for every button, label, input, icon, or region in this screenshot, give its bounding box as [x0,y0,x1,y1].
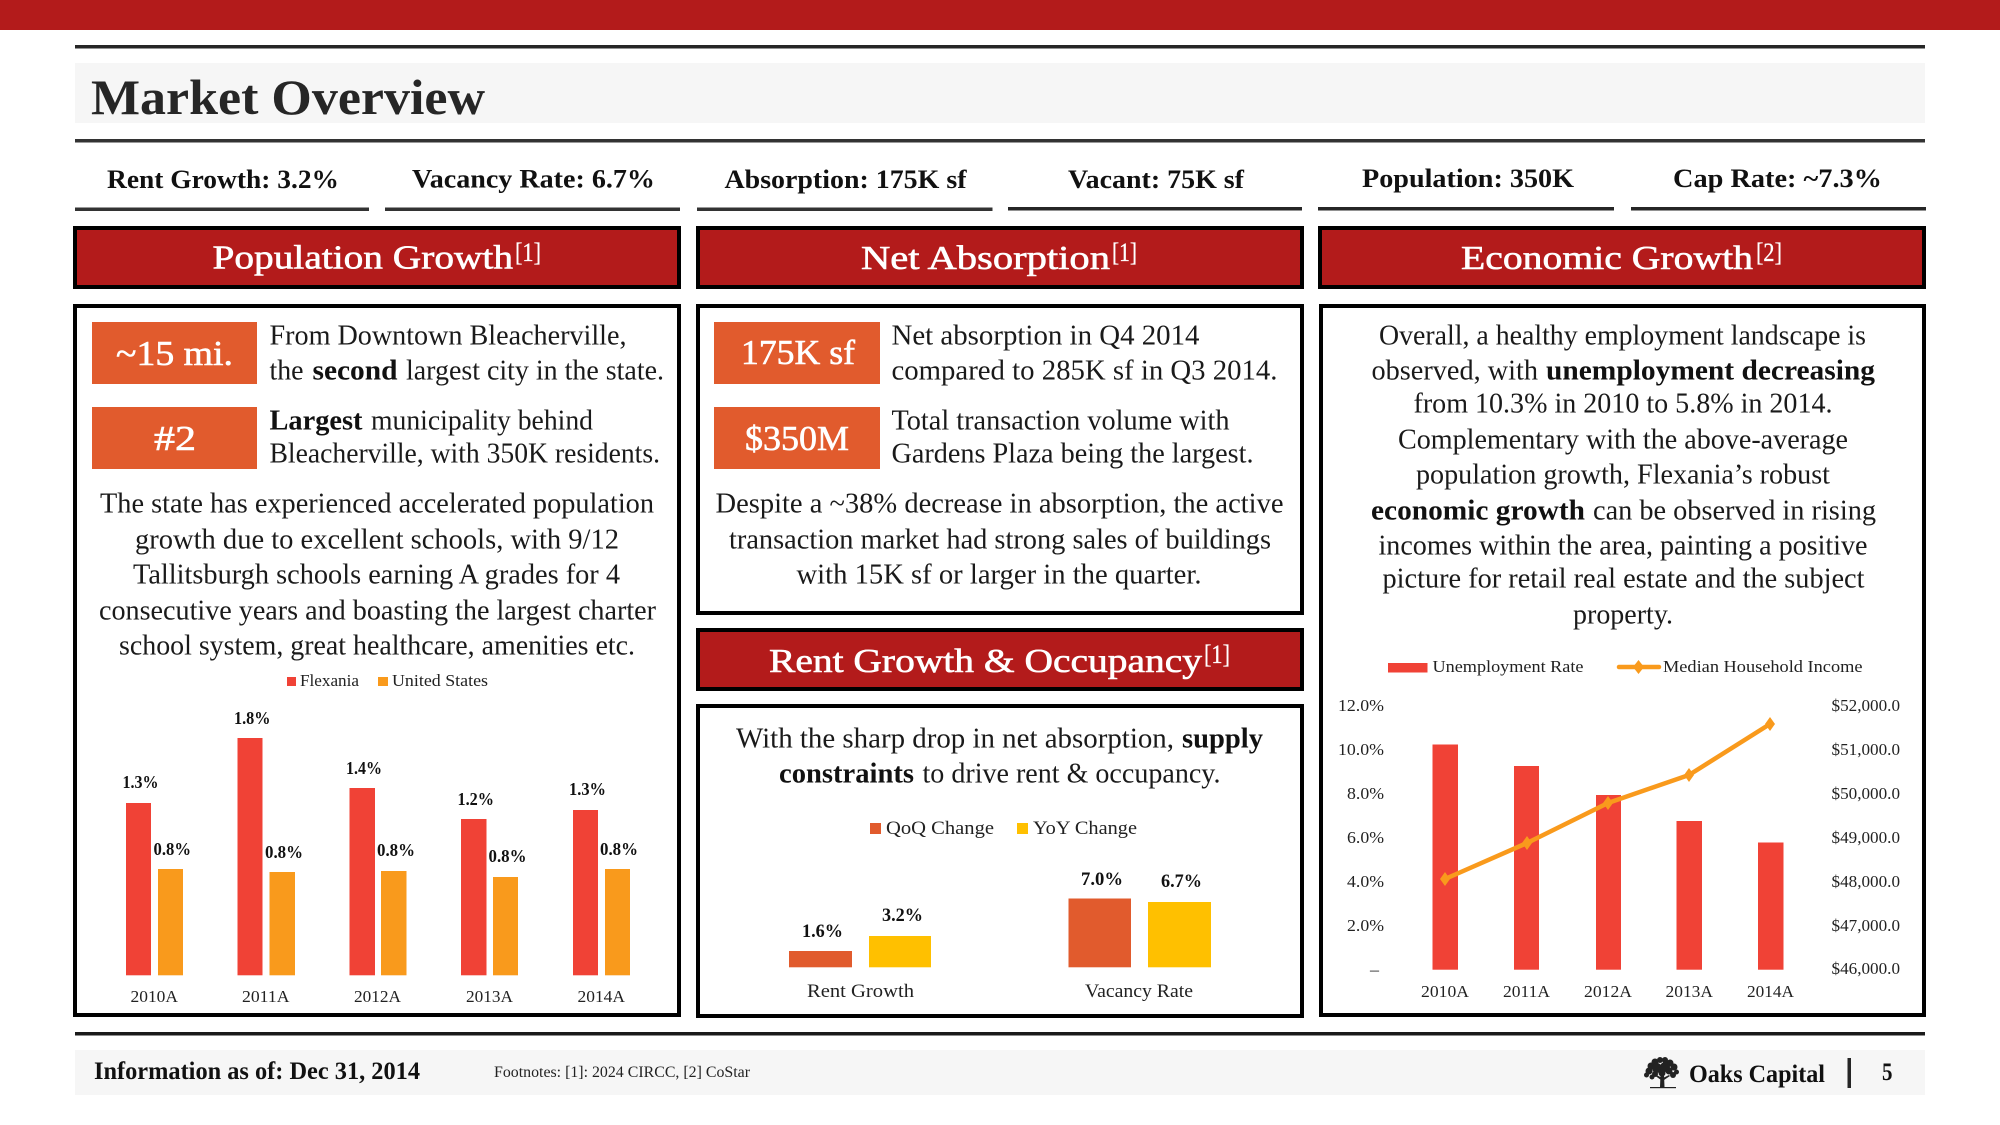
text: absorption paragraph [716,489,1284,591]
bar chart: rent and vacancy: 7.0% [1081,869,1123,890]
bar chart: population growth [122,671,638,1006]
text: population paragraph: The state has experienced accelerated population [100,489,654,520]
text: economic paragraph: population growth, Flexania’s robust [1416,460,1830,491]
heading: population growth: Population Growth [212,240,513,276]
text: rank note [270,406,660,470]
stat: transaction volume [714,407,880,469]
text: absorption paragraph: transaction market had strong sales of buildings [729,525,1271,556]
text: transaction note: Gardens Plaza being the largest. [892,439,1254,470]
text: absorption paragraph: Despite a ~38% decrease in absorption, the active [716,489,1284,520]
text: supply constraints: constraints [779,759,914,790]
text: distance note [270,321,664,387]
KPI: rent growth: Rent Growth: 3.2% [107,165,339,194]
text: economic paragraph [1371,321,1876,631]
legend: Flexania [300,671,359,690]
text: absorption note [892,321,1278,387]
icon: oak tree logo [1644,1057,1679,1088]
legend: Unemployment Rate [1432,657,1584,676]
text: economic paragraph: incomes within the area, painting a positive [1378,531,1868,562]
combo chart: unemployment and income: 2011A [1503,982,1551,1001]
KPI: vacant [1008,165,1302,210]
bar chart: rent and vacancy: 6.7% [1161,871,1202,892]
legend [870,819,1137,839]
text: supply constraints: With the sharp drop in net absorption, [736,724,1174,755]
heading: rent growth and occupancy: [1] [1204,640,1230,669]
panel: economic growth [1321,306,1924,1015]
text: economic paragraph: picture for retail real estate and the subject [1382,564,1865,595]
left axis: – [1369,960,1380,979]
footer: as-of date: Information as of: Dec 31, 2014 [94,1058,420,1085]
stat: net absorption [714,322,880,384]
right axis: $47,000.0 [1832,916,1900,935]
stat: distance: ~15 mi. [116,334,233,373]
KPI: vacancy rate: Vacancy Rate: 6.7% [412,164,655,194]
bar chart: population growth: 2010A [130,987,179,1006]
legend: YoY Change [1033,819,1137,839]
legend: United States [392,671,488,690]
text: economic paragraph: unemployment decreasing [1546,356,1875,387]
bar chart: population growth: 2014A [578,987,626,1006]
text: transaction note: Total transaction volume with [892,406,1230,437]
text: economic paragraph: economic growth [1371,496,1585,527]
bar chart: population growth: 0.8% [154,839,191,859]
KPI strip [75,164,1926,211]
heading: net absorption: Net Absorption [861,240,1110,277]
right axis: $51,000.0 [1832,740,1900,759]
bar chart: population growth: 2011A [242,987,290,1006]
left axis: 8.0% [1347,784,1384,803]
KPI: population [1318,164,1614,210]
text: population paragraph: Tallitsburgh schools earning A grades for 4 [133,560,620,591]
KPI: vacant: Vacant: 75K sf [1068,165,1244,194]
right axis: $50,000.0 [1832,784,1900,803]
text: supply constraints [736,724,1263,790]
heading: rent growth and occupancy [698,630,1302,689]
KPI: cap rate [1631,164,1926,210]
text: rank note: municipality behind [371,406,593,437]
text: distance note: largest city in the state. [406,356,664,387]
legend: Median Household Income [1663,657,1862,676]
bar chart: rent and vacancy: 1.6% [802,921,843,942]
left axis: 4.0% [1347,872,1384,891]
text: population paragraph: consecutive years and boasting the largest charter [99,596,657,627]
KPI: rent growth [75,165,369,211]
heading: rent growth and occupancy: Rent Growth & Occupancy [769,643,1202,680]
text: economic paragraph: observed, with [1372,356,1538,387]
text: population paragraph: school system, great healthcare, amenities etc. [119,631,635,662]
panel: net absorption [698,306,1302,613]
left axis: 2.0% [1347,916,1384,935]
combo chart: unemployment and income: 2013A [1666,982,1714,1001]
footer: page number: 5 [1882,1059,1892,1086]
bar chart: population growth: 0.8% [488,846,526,866]
KPI: cap rate: Cap Rate: ~7.3% [1673,164,1882,193]
stat: distance [92,322,257,384]
text: absorption note: Net absorption in Q4 2014 [892,321,1200,352]
panel: rent growth and occupancy [698,706,1302,1016]
bar chart: population growth: 0.8% [377,840,415,860]
income line [1440,717,1775,886]
legend [1388,657,1862,676]
heading: population growth [75,228,679,287]
bar chart: rent and vacancy [789,819,1211,1002]
text: distance note: From Downtown Bleacherville, [270,321,626,352]
text: absorption paragraph: with 15K sf or larger in the quarter. [796,560,1202,591]
footer: footnotes: Footnotes: [1]: 2024 CIRCC, [2] CoStar [494,1064,751,1081]
bar chart: population growth: 1.4% [346,758,382,778]
KPI: absorption [697,165,992,211]
combo chart: unemployment and income [1338,657,1900,1001]
right axis: $48,000.0 [1832,872,1900,891]
left axis [1338,696,1384,979]
heading: net absorption: [1] [1112,238,1137,267]
right axis [1832,696,1900,978]
right axis: $52,000.0 [1832,696,1900,715]
text: distance note: second [312,356,398,387]
heading: economic growth: Economic Growth [1461,240,1753,277]
right axis: $49,000.0 [1832,828,1900,847]
bar chart: population growth: 1.3% [569,779,606,799]
bar chart: population growth: 1.3% [122,772,158,792]
heading: economic growth: [2] [1756,238,1782,267]
bar chart: rent and vacancy: Rent Growth [807,982,914,1002]
combo chart: unemployment and income: 2010A [1421,982,1470,1001]
legend: QoQ Change [886,819,994,839]
text: rank note: Largest [270,406,363,437]
top red banner [0,0,2000,30]
legend [287,671,488,690]
footer band [75,1050,1925,1095]
left axis: 12.0% [1338,696,1384,715]
text: economic paragraph: Complementary with the above-average [1398,425,1848,456]
text: supply constraints: supply [1182,724,1263,755]
stat: net absorption: 175K sf [741,333,855,372]
bar chart: population growth: 0.8% [600,839,638,859]
left axis: 6.0% [1347,828,1384,847]
text: economic paragraph: can be observed in rising [1593,496,1876,527]
text: supply constraints: to drive rent & occupancy. [922,759,1220,790]
right axis: $46,000.0 [1832,959,1900,978]
KPI: absorption: Absorption: 175K sf [724,165,967,194]
heading: net absorption [698,228,1302,287]
footer: company name: Oaks Capital [1689,1061,1825,1088]
left axis: 10.0% [1338,740,1384,759]
bar chart: population growth: 1.2% [458,789,494,809]
bar chart: population growth: 1.8% [234,708,270,728]
text: transaction note [892,406,1254,470]
KPI: vacancy rate [385,164,680,211]
KPI: population: Population: 350K [1362,164,1575,193]
bar chart: population growth: 2013A [466,987,514,1006]
stat: transaction volume: $350M [745,419,849,458]
bar chart: population growth: 2012A [354,987,402,1006]
stat: rank: #2 [154,419,196,458]
text: population paragraph: growth due to excellent schools, with 9/12 [135,525,619,556]
heading: population growth: [1] [515,238,541,267]
bar chart: rent and vacancy: 3.2% [882,905,923,926]
text: distance note: the [270,356,304,387]
text: absorption note: compared to 285K sf in Q3 2014. [892,356,1278,387]
text: economic paragraph: property. [1573,600,1673,631]
panel: population growth [75,306,679,1015]
stat: rank [92,407,257,469]
combo chart: unemployment and income: 2014A [1747,982,1795,1001]
title band [75,63,1925,125]
heading: economic growth [1320,228,1924,287]
unemployment bars [1432,744,1784,970]
title band: Market Overview [91,69,485,125]
bar chart: population growth: 0.8% [265,842,303,862]
text: economic paragraph: Overall, a healthy employment landscape is [1379,321,1866,352]
combo chart: unemployment and income: 2012A [1584,982,1633,1001]
text: economic paragraph: from 10.3% in 2010 to 5.8% in 2014. [1414,389,1832,420]
text: population paragraph [99,489,657,662]
text: rank note: Bleacherville, with 350K residents. [270,439,660,470]
bar chart: rent and vacancy: Vacancy Rate [1085,982,1193,1002]
